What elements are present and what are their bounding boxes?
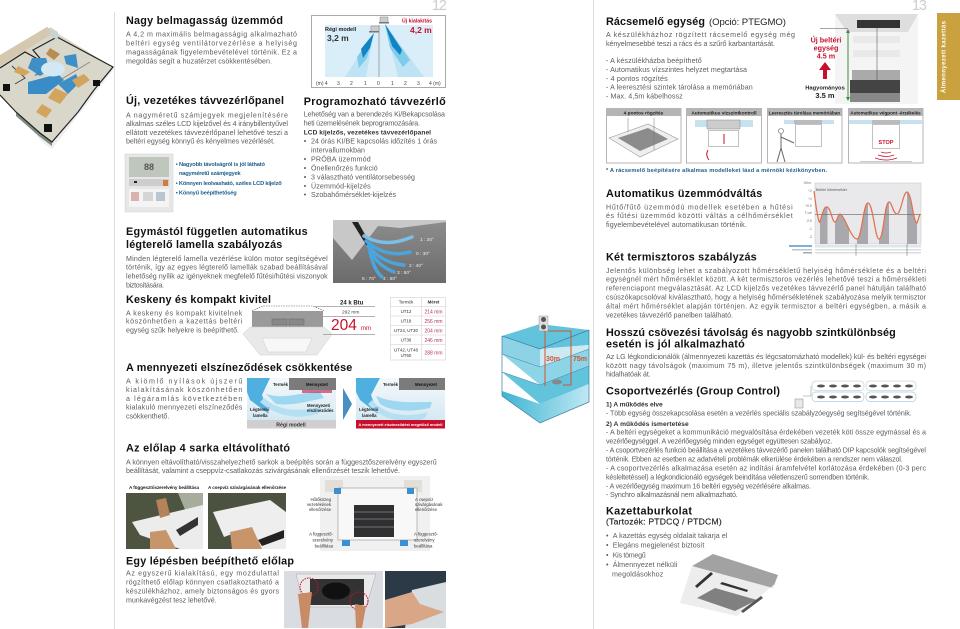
chart: automatic mode changeover temperature curve: T.cél — [805, 211, 812, 215]
text: long piping — [606, 353, 926, 379]
tab: category label — [937, 13, 960, 100]
icon: hanger adjustment photo: A függesztőszerelvény beállítása — [129, 485, 199, 490]
text: auto changeover: figyelembevételével automatikusan történik. — [606, 221, 747, 229]
panel: automatic horizontal control — [686, 108, 762, 163]
text: new wired remote: A nagyméretű számjegyek megjelenítésére — [126, 111, 288, 119]
icon: louver airflow angles photo — [333, 220, 446, 283]
heading: dual thermistor: Két termisztoros szabályzás — [606, 252, 757, 264]
text: programmable remote: Önellenőrzés funkció — [311, 164, 378, 172]
icon: compact cassette unit with dimensions: 292 mm — [342, 310, 359, 316]
text: ceiling discoloration — [126, 377, 243, 421]
text: programmable remote: 3 választható ventilátorsebesség — [311, 173, 415, 181]
panel: lowering height memory — [767, 108, 842, 163]
text: dual thermistor: csúszókapcsolóval kiválasztható, hogy a helyiség hőmérsékletének szabályozása melyik termisztor — [606, 294, 927, 302]
heading: long piping — [606, 327, 896, 351]
list: cover features: • — [606, 532, 609, 540]
text: removable corners: beállítását, valamint a cseppvíz-csatlakozás szivárgásának ellenőrzését teszik lehetővé. — [126, 467, 400, 475]
heading: high ceiling mode: Nagy belmagasság üzemmód — [126, 15, 283, 27]
icon: new model airflow diagram: Légterelő — [359, 407, 379, 412]
text: high ceiling mode: megoldás segít a huzatérzet csökkentésében. — [126, 57, 272, 65]
panel: end point detection: Automatikus végpont -érzékelés — [850, 110, 921, 116]
text: grille lift — [606, 31, 795, 48]
table: model sizes: UT18 — [401, 318, 412, 324]
table: model sizes: 204 mm — [424, 328, 443, 334]
panel: lowering height memory: Leeresztés tárolása memóriában — [769, 110, 840, 116]
text: programmable remote: • — [304, 138, 307, 146]
text: long piping: Az LG légkondicionálók (álmennyezeti kazettás és légcsatornázható modellek) kül- és beltéri egységei — [606, 353, 926, 361]
heading: removable corners: Az előlap 4 sarka eltávolítható — [126, 442, 290, 454]
text: removable corners: A könnyen eltávolítható/visszahelyezhető sarkok a beépítés során a függesztőszerelvény egyszerű — [126, 458, 437, 466]
text: slim compact design: köszönhetően a kazettás beltéri — [126, 318, 243, 326]
table: model sizes: 256 mm — [424, 319, 443, 325]
text: slim compact design — [126, 310, 243, 334]
icon: group control network — [795, 381, 916, 408]
icon: drain leak check photo: A csepvíz szivárgásának ellenőrzése — [208, 485, 286, 490]
panel: 4 point fixing: 4 pontos rögzítés — [624, 110, 664, 116]
page dividers — [114, 0, 594, 629]
icon: new model airflow diagram: Mennyezet — [415, 382, 438, 387]
icon: outdoor unit and multi-storey building — [502, 316, 589, 423]
table: model sizes — [390, 298, 446, 360]
heading: cassette cover: Kazettaburkolat — [606, 506, 692, 518]
heading: independent louver control: Egymástól független automatikus — [126, 226, 308, 238]
chart: ceiling height airflow comparison: 3 — [337, 81, 340, 87]
icon: compact cassette unit with dimensions: 204 — [331, 317, 357, 334]
text: new wired remote — [126, 111, 288, 146]
text: group control: - A csoportvezérlés alkalmazása esetén az indítási áramfelvétel korlátozása érdekében (0-3 perc — [606, 464, 926, 472]
icon: compact cassette unit with dimensions: mm — [361, 326, 371, 332]
icon: grille lift height diagram: Új beltéri — [811, 36, 841, 44]
icon: cassette cover unit — [680, 554, 778, 616]
list: cover features: megoldásokhoz — [612, 571, 664, 579]
text: one-step panel: Az egyszerű kialakítású, egy mozdulattal — [126, 570, 279, 578]
chart: ceiling height airflow comparison: 2 — [404, 81, 407, 87]
list: grille lift features: - Automatikus vízszintes helyzet megtartása — [606, 66, 747, 74]
text: high ceiling mode — [126, 31, 297, 65]
icon: ceiling panel with corner labels: szivárgásának — [415, 502, 443, 507]
text: one-step panel: készülékházhoz, amely biztonságos és gyors — [126, 588, 279, 596]
text: group control: - A csoportvezérlés funkció beállítása a vezetékes távvezérlő panelen található DIP kapcsolók segítségével — [606, 447, 926, 455]
text: group control: késleltetéssel) a légkondicionáló egységek beindítása véletlenszerű sorrendben történik. — [606, 473, 869, 481]
text: independent louver control — [126, 255, 328, 290]
list: cover features: • — [606, 542, 609, 550]
icon: hand close-up photo — [385, 571, 446, 628]
heading: slim compact design: Keskeny és kompakt kivitel — [126, 294, 271, 306]
text: group control: - A beltéri egységeket a kommunikáció megvalósítása érdekében vezeték köti össze egymással és a — [606, 429, 926, 437]
icon: new model airflow diagram — [356, 378, 445, 428]
text: new wired remote: ellátott vezetékes távvezérlőpanel lehetővé teszi a — [126, 129, 288, 137]
heading: new wired remote: Új, vezetékes távvezérlőpanel — [126, 94, 284, 107]
text: grille lift: kényelmesebbé teszi a rács és a szűrő karbantartását. — [606, 40, 775, 48]
table: model sizes: 288 mm — [424, 350, 443, 356]
icon: ceiling panel with corner labels: szerelvény — [414, 538, 435, 542]
chart: automatic mode changeover temperature curve: -0.5 — [806, 219, 812, 223]
icon: new model airflow diagram: lamella — [362, 413, 377, 418]
icon: compact cassette unit with dimensions — [243, 300, 375, 355]
text: one-step panel: rögzíthető előlap könnyen csatlakoztatható a — [126, 579, 279, 587]
icon: ceiling panel with corner labels: ellenőrzése — [309, 507, 332, 512]
chart: ceiling height airflow comparison: 1 — [364, 81, 367, 87]
text: one-step panel — [126, 570, 279, 605]
table: model sizes: UT42, UT48 — [394, 348, 419, 352]
panel: 4 point fixing — [606, 108, 681, 163]
text: independent louver control: történik, így az egyes légterelő lamellák szabad beállításával — [126, 264, 328, 272]
list: cover features: Kis tömegű — [613, 551, 646, 559]
list: grille lift features — [606, 57, 753, 101]
text: group control: - Több egység összekapcsolása esetén a vezérlés speciális szabályzóegység segítségével történik. — [606, 410, 912, 418]
icon: ceiling panel with corner labels: beállítása — [414, 544, 433, 548]
icon: louver airflow angles photo: 4 : 60° — [383, 276, 397, 282]
heading: group control: Csoportvezérlés (Group Control) — [606, 386, 780, 398]
list: cover features: • — [606, 561, 609, 569]
heading: independent louver control: légterelő lamella szabályozás — [126, 239, 282, 251]
chart: ceiling height airflow comparison: 1 — [391, 81, 394, 87]
icon: old model airflow diagram: Mennyezeti — [307, 403, 330, 408]
panel: end point detection: STOP — [879, 140, 894, 146]
panel: automatic horizontal control: Automatikus vízszintkontroll — [691, 110, 757, 116]
bullet list: remote benefits: • Nagyobb távolságról is jól látható — [176, 162, 266, 168]
icon: outdoor unit and multi-storey building: 30m — [546, 356, 560, 363]
text: programmable remote: • — [304, 173, 307, 181]
bullet list: remote benefits: • Könnyen leolvasható, széles LCD kijelző — [176, 181, 282, 187]
icon: grille lift height diagram: 3.5 m — [815, 91, 835, 100]
text: ceiling discoloration: kialakításának köszönhetően — [126, 386, 242, 394]
text: programmable remote: Szobahőmérséklet-kijelzés — [311, 191, 396, 199]
text: independent louver control: Minden légterelő lamella vezérlése külön motor segítségével — [126, 255, 328, 263]
text: removable corners — [126, 458, 437, 475]
text: ceiling discoloration: A kiömlő nyílások újszerű — [126, 377, 242, 385]
text: dual thermistor — [606, 267, 927, 320]
heading: grille lift — [606, 16, 786, 28]
icon: old model airflow diagram: Légterelő — [250, 407, 270, 412]
chart: automatic mode changeover temperature curve: -2 — [809, 235, 812, 239]
heading: programmable remote: Programozható távvezérlő — [304, 96, 446, 108]
chart: ceiling height airflow comparison: Új kialakítás — [402, 18, 432, 24]
icon: panel installation photo — [284, 571, 383, 628]
chart: ceiling height airflow comparison: 4,2 m — [410, 25, 432, 35]
table: model sizes: UT24, UT30 — [394, 328, 419, 333]
icon: ceiling panel with corner labels: szerelvény — [312, 538, 334, 542]
text: dual thermistor: által mért hőmérséklet alapján történjen. Az egyik termisztor a beltéri egységben, a másik a — [606, 303, 926, 311]
list: grille lift features: - A készülékházba beépíthető — [606, 57, 702, 65]
text: programmable remote: LCD kijelzős, vezetékes távvezérlőpanel — [304, 129, 431, 136]
icon: ceiling panel with corner labels: ellenőrzése — [415, 507, 438, 512]
heading: grille lift: (Opció: PTEGMO) — [709, 17, 786, 28]
icon: ceiling panel with corner labels: beállítása — [315, 544, 334, 548]
heading: grille lift: Rácsemelő egység — [606, 16, 705, 28]
list: grille lift features: - 4 pontos rögzítés — [606, 75, 668, 83]
chart: automatic mode changeover temperature curve: +1 — [808, 197, 812, 201]
heading: independent louver control — [126, 226, 308, 251]
icon: new model airflow diagram: A mennyezeti elszíneződést megelőző modell — [359, 422, 442, 427]
icon: new model airflow diagram: Termék — [383, 382, 399, 387]
table: model sizes: 246 mm — [424, 338, 443, 344]
icon: old model airflow diagram: Termék — [273, 382, 289, 387]
icon: compact cassette unit with dimensions: 24 k Btu — [340, 300, 364, 306]
panel: end point detection — [848, 108, 923, 163]
text: programmable remote: intervallumokban — [311, 147, 365, 155]
chart: ceiling height airflow comparison: Régi modell — [325, 27, 357, 33]
text: programmable remote: Üzemmód-kijelzés — [311, 182, 371, 190]
text: group control: 2) A működés ismertetése — [606, 421, 689, 428]
list: cover features: Álmennyezet nélküli — [613, 560, 678, 569]
text: high ceiling mode: A 4,2 m maximális belmagasságig alkalmazható — [126, 31, 297, 39]
table: model sizes: 214 mm — [424, 310, 443, 316]
text: auto changeover: Hűtő/fűtő üzemmódú modellek esetében a hűtési — [606, 203, 793, 211]
heading: long piping: Hosszú csövezési távolság és nagyobb szintkülönbség — [606, 327, 896, 339]
list: grille lift features: - Max. 4,5m kábelhossz — [606, 93, 683, 101]
chart: automatic mode changeover temperature curve: -1 — [809, 227, 812, 231]
table: model sizes: UT12 — [401, 309, 412, 314]
icon: drain leak check photo — [208, 485, 286, 549]
text: ceiling discoloration: kialakuló mennyezeti elszíneződés — [126, 404, 243, 412]
icon: grille lift height diagram: 4.5 m — [817, 52, 835, 60]
text: programmable remote — [304, 111, 445, 199]
text: programmable remote: • — [304, 155, 307, 163]
chart: ceiling height airflow comparison: 0 — [377, 81, 380, 87]
text: auto changeover: és fűtési üzemmód közötti váltás a célhőmérséklet — [606, 212, 793, 220]
text: ceiling discoloration: a légáramlás következtében — [126, 395, 242, 403]
heading: ceiling discoloration: A mennyezeti elszíneződések csökkentése — [126, 362, 352, 374]
bullet list: remote benefits: • Könnyű beépíthetőség — [176, 190, 237, 196]
text: group control — [606, 402, 926, 499]
icon: wired remote controller: 88 — [144, 162, 154, 172]
text: dual thermistor: referenciapont megválasztását. Az LCD kijelzős vezetékes távvezérlő panel hátulján található — [606, 285, 926, 293]
text: programmable remote: heti üzemelésének beprogramozására. — [304, 119, 420, 127]
icon: louver airflow angles photo: 0 : 30° — [416, 251, 430, 257]
chart: automatic mode changeover temperature curve: Beltéri hőmérséklet — [816, 188, 847, 192]
arrow: improvement direction — [343, 388, 352, 420]
text: programmable remote: • — [304, 182, 307, 190]
chart: ceiling height airflow comparison: 4 (m) — [429, 81, 441, 87]
text: one-step panel: munkavégzést tesz lehetővé. — [126, 597, 217, 605]
table: model sizes: Méret — [428, 300, 440, 304]
subheading: cover accessory codes: (Tartozék: PTDCQ / PTDCM) — [606, 516, 722, 526]
list: cover features — [606, 532, 728, 579]
icon: old model airflow diagram: lamella — [253, 413, 268, 418]
table: model sizes: UT60 — [401, 353, 412, 358]
text: long piping: hidalhatóak át. — [606, 371, 651, 379]
text: group control: történik. Ebben az esetben az adatvételi problémák elkerülése érdekében a rendszer nem válaszol. — [606, 455, 903, 463]
icon: ceiling panel with corner labels — [307, 476, 443, 551]
icon: wired remote controller — [125, 154, 173, 212]
list: cover features: Elegáns megjelenést biztosít — [613, 542, 704, 550]
icon: old model airflow diagram: Régi modell — [276, 422, 306, 428]
text: group control: vezérlőegységgel. A vezérlőegység minden egységet együttesen szabályoz. — [606, 438, 832, 446]
text: slim compact design: egység szűk helyekre is beépíthető. — [126, 326, 239, 334]
text: programmable remote: 24 órás KI/BE kapcsolás időzítés 1 órás — [311, 138, 437, 146]
chart: automatic mode changeover temperature curve: Hőm. — [804, 181, 812, 185]
chart: ceiling height airflow comparison: (m) 4 — [316, 81, 328, 87]
chart: automatic mode changeover temperature curve: +2 — [808, 189, 812, 193]
table: model sizes: Termék — [399, 300, 414, 304]
icon: ceiling panel with corner labels: vezetékének — [307, 502, 332, 507]
text: new wired remote: beltéri egység könnyű és kényelmes vezérlését. — [126, 138, 275, 146]
heading: one-step panel: Egy lépésben beépíthető előlap — [126, 556, 294, 568]
chart: automatic mode changeover temperature curve: +0.5 — [805, 204, 812, 208]
icon: old model airflow diagram: Mennyezet — [306, 382, 329, 387]
text: group control: - A vezérlőegység maximum 16 beltéri egység vezérlésére alkalmas. — [606, 482, 811, 490]
table: model sizes: UT36 — [401, 338, 412, 342]
icon: hanger adjustment photo — [126, 485, 203, 549]
text: independent louver control: biztosítására. — [126, 282, 164, 290]
icon: ceiling panel with corner labels: A függesztő- — [309, 532, 333, 536]
icon: louver airflow angles photo: 3 : 50° — [397, 270, 411, 276]
icon: grille lift height diagram — [805, 14, 918, 104]
text: group control: - Synchro alkalmazásnál nem alkalmazható. — [606, 491, 738, 499]
heading: auto changeover: Automatikus üzemmódváltás — [606, 188, 762, 200]
text: dual thermistor: Jelentős különbség lehet a szabályozott hőmérsékletű helyiség hőmérséklete és a beltéri — [606, 267, 926, 275]
icon: ceiling panel with corner labels: A függesztő- — [414, 532, 438, 536]
chart: ceiling height airflow comparison: 3,2 m — [327, 33, 349, 43]
chart: automatic mode changeover temperature curve — [789, 181, 921, 256]
chart: ceiling height airflow comparison: 2 — [350, 81, 353, 87]
text: independent louver control: lehetőség nyílik az igényeknek megfelelő fűtési/hűtési viszonyok — [126, 273, 328, 281]
text: high ceiling mode: beltéri egység ventilátorvezérlése a helyiség — [126, 40, 297, 48]
list: cover features: • — [606, 551, 609, 559]
icon: louver airflow angles photo: 5 : 70° — [362, 276, 376, 282]
icon: grille lift height diagram: egység — [814, 44, 838, 52]
icon: grille lift height diagram: Hagyományos — [805, 86, 845, 92]
text: long piping: között nagy távolságok (maximum 75 m), illetve jelentős szintkülönbségek (maximum 30 m) — [606, 362, 926, 370]
icon: louver airflow angles photo: 1 : 20° — [420, 237, 434, 243]
text: dual thermistor: vezetékes távvezérlő panelben található. — [606, 312, 733, 320]
text: auto changeover — [606, 203, 793, 229]
chart: ceiling height airflow comparison: 3 — [417, 81, 420, 87]
icon: old model airflow diagram — [247, 378, 336, 428]
text: high ceiling mode: magasságának figyelembevételével történik. Ez a — [126, 48, 297, 56]
icon: louver airflow angles photo: 2 : 40° — [409, 263, 423, 269]
icon: outdoor unit and multi-storey building: 75m — [573, 356, 587, 363]
text: dual thermistor: egységnél mért hőmérséklet között. A két termisztoros vezérlés lehetővé teszi a hőmérsékleti — [606, 276, 926, 284]
tab: category label: Álmennyezeti kazettás — [940, 20, 948, 93]
heading: long piping: esetén is jól alkalmazható — [606, 339, 745, 351]
text: grille lift: A készülékházhoz rögzített rácsemelő egység még — [606, 31, 795, 39]
note: grille lift models: * A rácsemelő beépítésére alkalmas modelleket lásd a mérnöki kézikönyvben. — [606, 168, 827, 174]
text: programmable remote: • — [304, 164, 307, 172]
text: new wired remote: alkalmas széles LCD kijelzővel és 4 iránybillentyűvel — [126, 120, 288, 128]
list: grille lift features: - A leeresztési szintek tárolása a memóriában — [606, 84, 753, 92]
text: ceiling discoloration: csökkenthető. — [126, 413, 169, 421]
text: programmable remote: • — [304, 191, 307, 199]
text: programmable remote: Lehetőség van a berendezés Ki/Bekapcsolása — [304, 111, 445, 119]
bullet list: remote benefits: nagyméretű számjegyek — [179, 171, 242, 177]
icon: ceiling panel with corner labels: A csepvíz — [415, 497, 433, 502]
icon: ceiling panel with corner labels: Hűtőközeg — [310, 497, 331, 502]
icon: old model airflow diagram: elszíneződés — [307, 408, 334, 413]
bullet list: remote benefits — [176, 162, 282, 196]
list: cover features: A kazettás egység oldalait takarja el — [613, 532, 728, 540]
text: slim compact design: A keskeny és kompakt kivitelnek — [126, 310, 243, 318]
icon: office floor plan illustration — [0, 27, 113, 149]
text: programmable remote: PRÓBA üzemmód — [311, 154, 371, 163]
chart: ceiling height airflow comparison — [312, 16, 446, 88]
text: group control: 1) A működés elve — [606, 402, 663, 409]
